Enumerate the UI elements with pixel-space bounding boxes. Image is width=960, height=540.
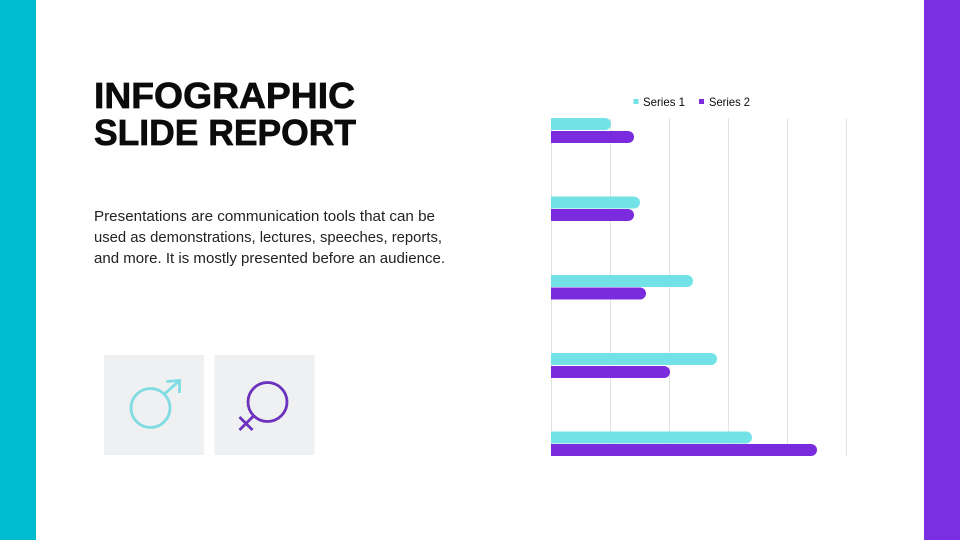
panel: female icon tile xyxy=(214,355,314,455)
series 1 bars xyxy=(551,118,752,444)
bar chart xyxy=(551,118,846,456)
chart legend xyxy=(634,95,750,109)
panel: male icon tile xyxy=(104,355,204,455)
chart gridlines xyxy=(552,118,846,456)
body text xyxy=(94,209,445,267)
chart legend: Series 1 xyxy=(643,95,685,109)
right purple band xyxy=(924,0,960,540)
chart legend: Series 2 xyxy=(709,95,750,109)
body text: and more. It is mostly presented before an audience. xyxy=(94,251,445,267)
body text: used as demonstrations, lectures, speeches, reports, xyxy=(94,230,442,246)
body text: Presentations are communication tools that can be xyxy=(94,209,435,225)
title xyxy=(94,75,356,153)
title: SLIDE REPORT xyxy=(94,112,356,153)
left cyan band xyxy=(0,0,36,540)
icon: female symbol xyxy=(240,382,287,430)
icon: male symbol xyxy=(131,380,180,428)
series 2 bars xyxy=(551,131,817,456)
title: INFOGRAPHIC xyxy=(94,75,355,116)
